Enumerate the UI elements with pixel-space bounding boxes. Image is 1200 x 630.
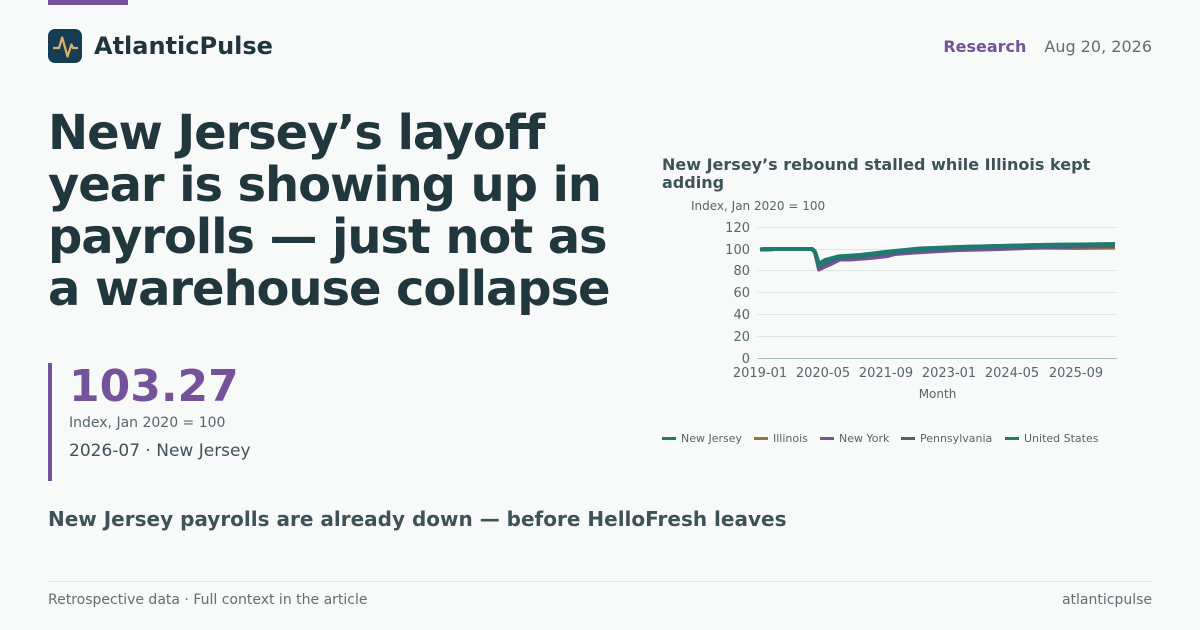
line: United States (760, 244, 1115, 264)
legend: United States: United States (1024, 432, 1099, 445)
data lines (760, 244, 1115, 270)
brand name: AtlanticPulse (94, 32, 273, 60)
header meta: Research Aug 20, 2026 (943, 37, 1152, 56)
y axis labels: 100 (725, 243, 750, 258)
y axis labels: 0 (742, 352, 750, 367)
legend: New Jersey: New Jersey (681, 432, 743, 445)
x axis labels: 2023-01 (922, 366, 976, 381)
line: New Jersey (760, 244, 1115, 265)
y axis labels: 60 (733, 286, 750, 301)
legend: Pennsylvania: Pennsylvania (920, 432, 992, 445)
legend (662, 432, 1099, 445)
x axis labels (733, 366, 1103, 381)
brand header (48, 29, 273, 63)
x axis labels: 2024-05 (985, 366, 1039, 381)
stat unit: Index, Jan 2020 = 100 (69, 415, 225, 431)
stat context: 2026-07 · New Jersey (69, 441, 251, 461)
legend: New York: New York (839, 432, 890, 445)
title (48, 105, 609, 317)
line: Pennsylvania (760, 246, 1115, 267)
chart title (662, 155, 1090, 192)
line: Illinois (760, 248, 1115, 268)
line: New York (760, 246, 1115, 270)
title: year is showing up in (48, 157, 601, 213)
footer note: Retrospective data · Full context in the article (48, 592, 367, 608)
y axis labels: 40 (733, 308, 750, 323)
x axis labels: 2020-05 (796, 366, 850, 381)
title: payrolls — just not as (48, 209, 607, 265)
subtitle: New Jersey payrolls are already down — before HelloFresh leaves (48, 507, 786, 531)
x axis title: Month (919, 387, 956, 401)
chart title: New Jersey’s rebound stalled while Illinois kept (662, 155, 1090, 174)
icon: pulse logo (48, 29, 82, 63)
x axis labels: 2021-09 (859, 366, 913, 381)
legend: Illinois (754, 432, 808, 445)
top accent bar (48, 0, 128, 5)
callout: key stat (48, 363, 348, 481)
legend: Illinois: Illinois (773, 432, 808, 445)
stat value: 103.27 (69, 361, 239, 412)
footer (48, 581, 1152, 618)
y axis labels: 120 (725, 221, 750, 236)
y axis labels: 20 (733, 330, 750, 345)
y axis labels (725, 221, 750, 367)
x axis labels: 2025-09 (1049, 366, 1103, 381)
title: New Jersey’s layoff (48, 105, 544, 161)
y axis title: Index, Jan 2020 = 100 (691, 199, 825, 213)
x axis labels: 2019-01 (733, 366, 787, 381)
y axis labels: 80 (733, 264, 750, 279)
footer brand: atlanticpulse (1062, 592, 1152, 608)
line chart (662, 199, 1117, 445)
title: a warehouse collapse (48, 261, 609, 317)
chart title: adding (662, 173, 724, 192)
